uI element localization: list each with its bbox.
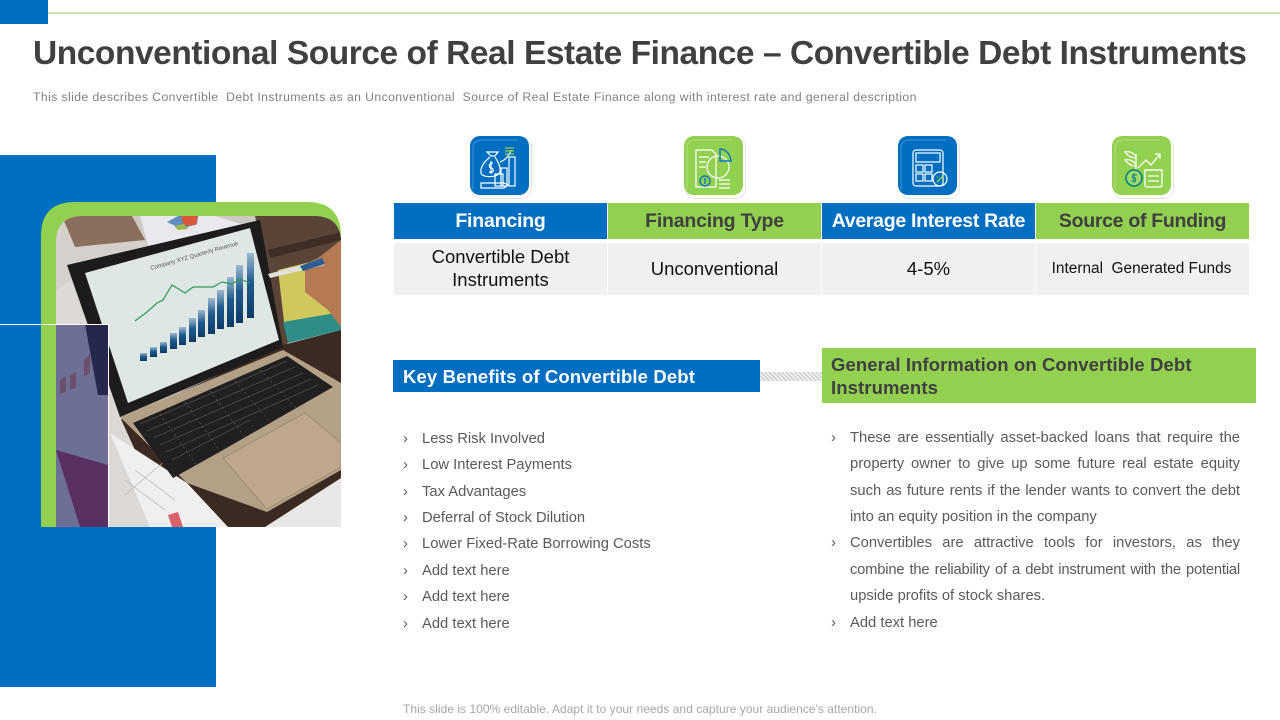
- table header: Financing: [394, 203, 607, 239]
- list: key benefits: [403, 431, 651, 632]
- list: key benefits: ›: [403, 457, 408, 473]
- list: key benefits: ›: [403, 484, 408, 500]
- list: key benefits: ›: [403, 431, 408, 447]
- hand with pen: [305, 240, 341, 327]
- table header: Average Interest Rate: Average Interest Rate: [832, 210, 1025, 232]
- trackpad: [223, 413, 341, 509]
- laptop photo: [56, 216, 341, 527]
- list: key benefits: Low Interest Payments: [422, 457, 572, 473]
- list: general information: into an equity position in the company: [850, 509, 1097, 525]
- heading: general information: General Information on Convertible Debt: [831, 354, 1192, 375]
- screen chart: Company XYZ Quarterly Revenue: [150, 241, 240, 272]
- subtitle: This slide describes Convertible Debt Instruments as an Unconventional Source of Real Estate Finance along with interest rate and general description: [33, 90, 917, 104]
- table cell: funding source value: Internal Generated Funds: [1052, 260, 1231, 276]
- table cell: financing type value: [608, 243, 821, 295]
- list: general information: such as future rents if the lender wants to convert the debt: [850, 483, 1240, 499]
- table cell: funding source value: [1036, 243, 1249, 295]
- list: general information: ›: [831, 615, 836, 631]
- list: key benefits: Lower Fixed-Rate Borrowing Costs: [422, 536, 651, 552]
- top accent bar: [0, 0, 1280, 24]
- list: general information: ›: [831, 535, 836, 551]
- overlay tint: [56, 324, 108, 527]
- icon: money bag and chart: [470, 136, 532, 199]
- list: general information: ›: [831, 430, 836, 446]
- list: general information: [831, 430, 1240, 631]
- icon: plant coin and growth arrow: [1112, 136, 1174, 199]
- table header: Financing Type: [608, 203, 821, 239]
- panel: photo with blue and green backing: [0, 155, 341, 687]
- list: general information: These are essentially asset-backed loans that require the: [850, 430, 1240, 446]
- list: key benefits: Tax Advantages: [422, 484, 526, 500]
- list: general information: Convertibles are attractive tools for investors, as they: [850, 535, 1240, 551]
- table cell: financing value: Instruments: [452, 269, 549, 290]
- table header: Financing Type: Financing Type: [645, 210, 784, 232]
- list: key benefits: ›: [403, 616, 408, 632]
- laptop base: [120, 350, 341, 512]
- heading: key benefits: Key Benefits of Convertible Debt: [403, 366, 695, 387]
- green frame: [41, 202, 341, 527]
- list: general information: upside profits of stock shares.: [850, 588, 1045, 604]
- heading: general information: Instruments: [831, 377, 938, 398]
- icon: calculator with percent: [898, 136, 960, 199]
- title: Unconventional Source of Real Estate Finance – Convertible Debt Instruments: [33, 35, 1246, 72]
- list: key benefits: Less Risk Involved: [422, 431, 545, 447]
- icon: report with pie chart: [684, 136, 746, 199]
- white corner line: [0, 324, 108, 527]
- table header: Source of Funding: Source of Funding: [1059, 210, 1226, 232]
- list: general information: combine the reliability of a debt instrument with the potential: [850, 562, 1240, 578]
- table cell: financing value: Convertible Debt: [432, 246, 569, 267]
- list: key benefits: Add text here: [422, 589, 510, 605]
- laptop bezel and screen: [67, 220, 283, 417]
- list: general information: Add text here: [850, 615, 938, 631]
- list: key benefits: Deferral of Stock Dilution: [422, 510, 585, 526]
- footer note: This slide is 100% editable. Adapt it to your needs and capture your audience's attention.: [403, 702, 877, 716]
- list: key benefits: Add text here: [422, 563, 510, 579]
- keyboard: [133, 356, 333, 478]
- table header: Source of Funding: [1036, 203, 1249, 239]
- heading: key benefits: [393, 360, 760, 392]
- table cell: interest rate value: 4-5%: [907, 258, 950, 278]
- list: general information: property owner to give up some future real estate equity: [850, 456, 1240, 472]
- heading: general information: [822, 348, 1256, 403]
- list: key benefits: ›: [403, 563, 408, 579]
- table header: Average Interest Rate: [822, 203, 1035, 239]
- table cell: interest rate value: [822, 243, 1035, 295]
- blue backing block: [0, 155, 216, 687]
- table cell: financing value: [394, 243, 607, 295]
- connector between headings: [760, 372, 822, 381]
- table cell: financing type value: Unconventional: [651, 258, 778, 278]
- list: key benefits: ›: [403, 510, 408, 526]
- table header: Financing: Financing: [455, 210, 546, 232]
- list: key benefits: Add text here: [422, 616, 510, 632]
- list: key benefits: ›: [403, 589, 408, 605]
- list: key benefits: ›: [403, 536, 408, 552]
